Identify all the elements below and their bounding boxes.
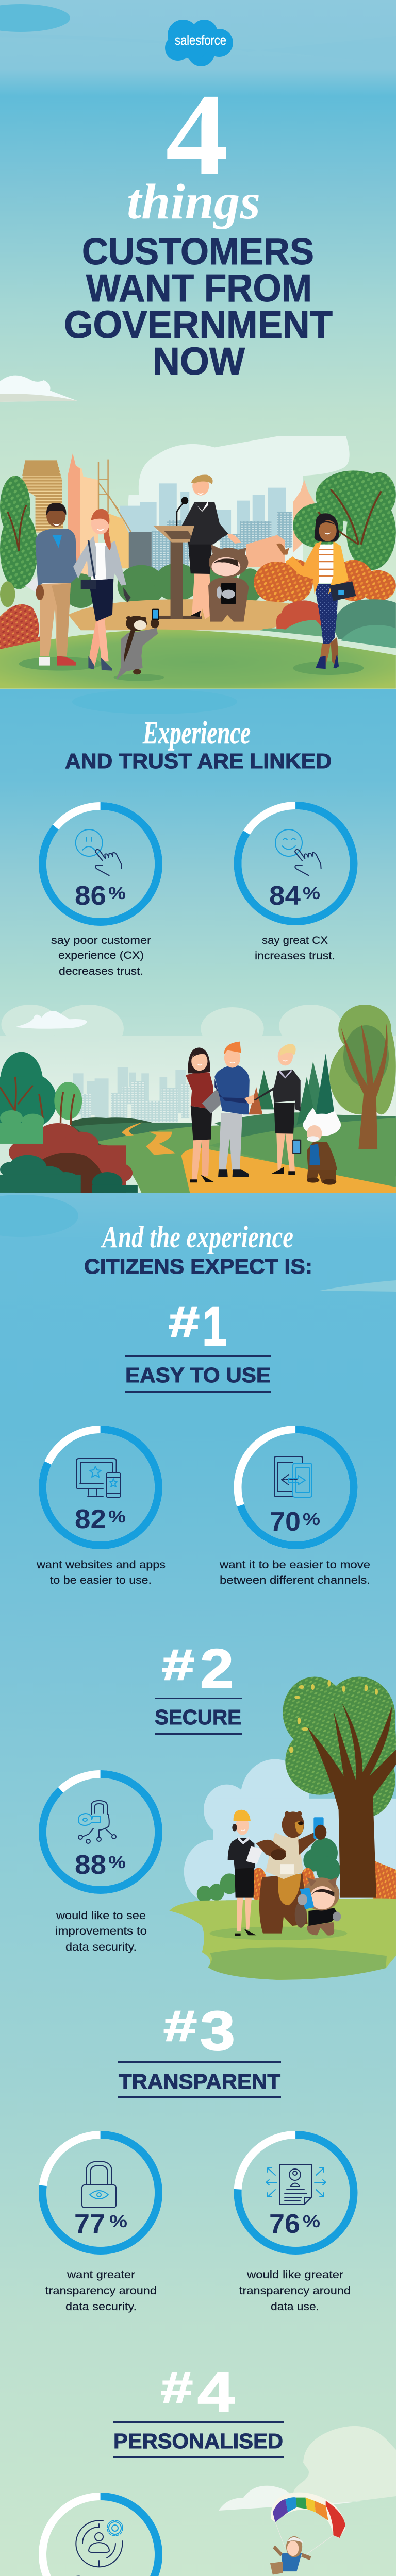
pale clouds (0, 1005, 396, 1125)
heading #4 personalised (113, 2361, 284, 2458)
mid green bushes (63, 560, 262, 608)
heading #3 transparent: # (163, 2002, 197, 2050)
grass hill (0, 630, 396, 689)
bushes (197, 1838, 396, 1903)
stat: 77% transparency data security: data security. (65, 2301, 137, 2313)
stat: 82% websites and apps (36, 1429, 166, 1586)
peach low building (246, 535, 285, 567)
orange bushes (254, 559, 396, 603)
heading #4 personalised: PERSONALISED (113, 2429, 283, 2453)
stat: 84% great CX: increases trust. (255, 950, 335, 962)
illustration: hero scene with podium and citizens (0, 436, 396, 689)
stat: 84% great CX: 84 (269, 881, 301, 911)
logo: salesforce cloud (top): salesforce (175, 32, 226, 48)
left trees (0, 1052, 82, 1133)
right trees (293, 470, 396, 570)
small cloud left of hero (0, 376, 77, 402)
stat: 77% transparency data security: transparency around (45, 2285, 157, 2297)
stat: 82% websites and apps: want websites and apps (36, 1559, 166, 1571)
stat: 77% transparency data security: 77 (74, 2209, 105, 2239)
heading #4 personalised: 4 (197, 2361, 235, 2423)
stat: 82% websites and apps: 82 (75, 1504, 106, 1534)
stat: 84% great CX: % (303, 884, 320, 903)
heading #2 secure: # (162, 1640, 194, 1689)
icon: happy face with pointer (275, 829, 321, 875)
skyline (120, 483, 292, 572)
icon: padlock with eye (82, 2161, 116, 2208)
gold tower (22, 460, 63, 532)
section heading: citizens expect (84, 1220, 312, 1278)
stat: 77% transparency data security: want greater (67, 2269, 135, 2281)
heading #1 easy to use (125, 1295, 271, 1393)
heading #2 secure: 2 (200, 1637, 234, 1700)
stat: 76% transparency data use: transparency around (239, 2285, 351, 2297)
green bushes (0, 1110, 138, 1193)
background cloud (124, 436, 350, 563)
heading #1 easy to use: 1 (202, 1295, 227, 1357)
stat: 86% poor CX: decreases trust. (59, 965, 143, 977)
left tree (0, 476, 38, 589)
stat: 86% poor CX: say poor customer (51, 935, 151, 946)
stat: 77% transparency data security: % (109, 2212, 127, 2231)
stat: 82% websites and apps: to be easier to use. (50, 1574, 152, 1586)
woman with hard hat and tablet (228, 1810, 263, 1936)
heading #4 personalised: # (161, 2363, 193, 2412)
peach tower and scaffold (68, 453, 131, 577)
illustration: paragliding astro (270, 2493, 345, 2574)
icon: profile document with arrows (266, 2164, 326, 2205)
section heading: citizens expect: CITIZENS EXPECT IS: (84, 1255, 312, 1278)
heading #1 easy to use: # (169, 1297, 200, 1346)
clouds near personalised section (219, 2426, 396, 2511)
einstein character (292, 1108, 341, 1185)
left red bush (0, 581, 53, 649)
woman with laptop (186, 1047, 226, 1182)
logo: salesforce cloud (top) (165, 20, 233, 66)
stat: 86% poor CX (42, 806, 159, 977)
section heading: experience and trust (65, 716, 332, 773)
title: things (127, 174, 260, 230)
heading #1 easy to use: EASY TO USE (125, 1363, 271, 1387)
stat: 88% data security improvements: improvements to (55, 1925, 147, 1937)
stat: 70% move between channels: % (303, 1510, 320, 1529)
yellow path (182, 1147, 396, 1193)
stat: 88% data security improvements: data security. (65, 1941, 137, 1953)
stat: 84% great CX: say great CX (262, 935, 328, 946)
front right bushes (260, 599, 396, 648)
stat: 84% great CX (238, 806, 354, 962)
grass island (169, 1898, 396, 1980)
section heading: experience and trust: AND TRUST ARE LINKED (65, 749, 332, 773)
low shadow ellipses (19, 657, 364, 681)
stat: 86% poor CX: % (108, 884, 126, 903)
heading #3 transparent: 3 (200, 1999, 235, 2062)
yellow building (109, 514, 131, 568)
title: GOVERNMENT (64, 303, 333, 346)
woman in black suit (244, 1044, 301, 1175)
man with tablet (25, 503, 77, 666)
stat: 88% data security improvements: 88 (75, 1850, 106, 1880)
title: WANT FROM (86, 266, 312, 310)
astro character (208, 545, 249, 622)
icon: person with gear (76, 2520, 123, 2567)
astro in trailblazer jacket (295, 1877, 341, 1936)
woman with folder (276, 513, 356, 669)
podium (153, 526, 206, 619)
section heading: citizens expect: And the experience (101, 1220, 293, 1254)
stat: 64% tailored services (29, 2497, 173, 2576)
title: 4 (166, 70, 228, 200)
section heading: experience and trust: Experience (142, 716, 251, 751)
stat: 86% poor CX: experience (CX) (58, 950, 144, 961)
stat: 88% data security improvements (42, 1774, 159, 1953)
title (64, 70, 333, 383)
stat: 88% data security improvements: would like to see (56, 1910, 146, 1922)
stat: 86% poor CX: 86 (75, 881, 106, 911)
stat: 76% transparency data use: % (303, 2212, 320, 2231)
right tree (329, 1005, 396, 1149)
stat: 76% transparency data use (238, 2135, 354, 2313)
stat: 88% data security improvements: % (108, 1853, 126, 1872)
heading #2 secure: SECURE (155, 1705, 241, 1729)
bear with vest and phone (256, 1811, 326, 1934)
dirt path (68, 599, 302, 630)
heading #3 transparent: TRANSPARENT (119, 2070, 280, 2093)
woman with shoulder bag (73, 509, 131, 671)
raccoon with phone (116, 609, 159, 680)
microphone (177, 497, 188, 526)
illustration: secure scene on grass island (169, 1677, 396, 1980)
red bush (9, 1123, 133, 1193)
icon: padlock key and circuit (78, 1801, 116, 1843)
horizon hills (71, 1112, 396, 1193)
pale cloud (184, 1759, 396, 1903)
stat: 70% move between channels: 70 (270, 1507, 301, 1537)
stat: 77% transparency data security (42, 2135, 159, 2313)
small winding path (122, 1122, 175, 1155)
stat: 76% transparency data use: 76 (269, 2209, 300, 2239)
illustration: handshake scene with city and trees (0, 1005, 396, 1193)
stat: 76% transparency data use: would like greater (246, 2269, 343, 2281)
icon: monitor and phone (76, 1459, 121, 1497)
small white cloud (15, 1011, 87, 1029)
tree (283, 1677, 396, 1898)
stat: 82% websites and apps: % (108, 1507, 126, 1526)
stat: 70% move between channels (219, 1429, 370, 1586)
icon: tablets with arrows (274, 1456, 312, 1497)
heading #2 secure (155, 1637, 242, 1735)
man with orange hair (214, 1042, 250, 1177)
title: NOW (153, 340, 245, 383)
heading #3 transparent (118, 1999, 281, 2098)
stat: 70% move between channels: want it to be easier to move (219, 1559, 370, 1571)
stat: 76% transparency data use: data use. (271, 2301, 319, 2313)
pale skyline (73, 1067, 189, 1122)
speaker woman (182, 475, 241, 619)
stat: 70% move between channels: between different channels. (220, 1574, 370, 1586)
pines (249, 1054, 335, 1125)
icon: sad face with pointer (76, 829, 122, 875)
title: CUSTOMERS (82, 231, 314, 273)
clock tower (293, 480, 315, 553)
